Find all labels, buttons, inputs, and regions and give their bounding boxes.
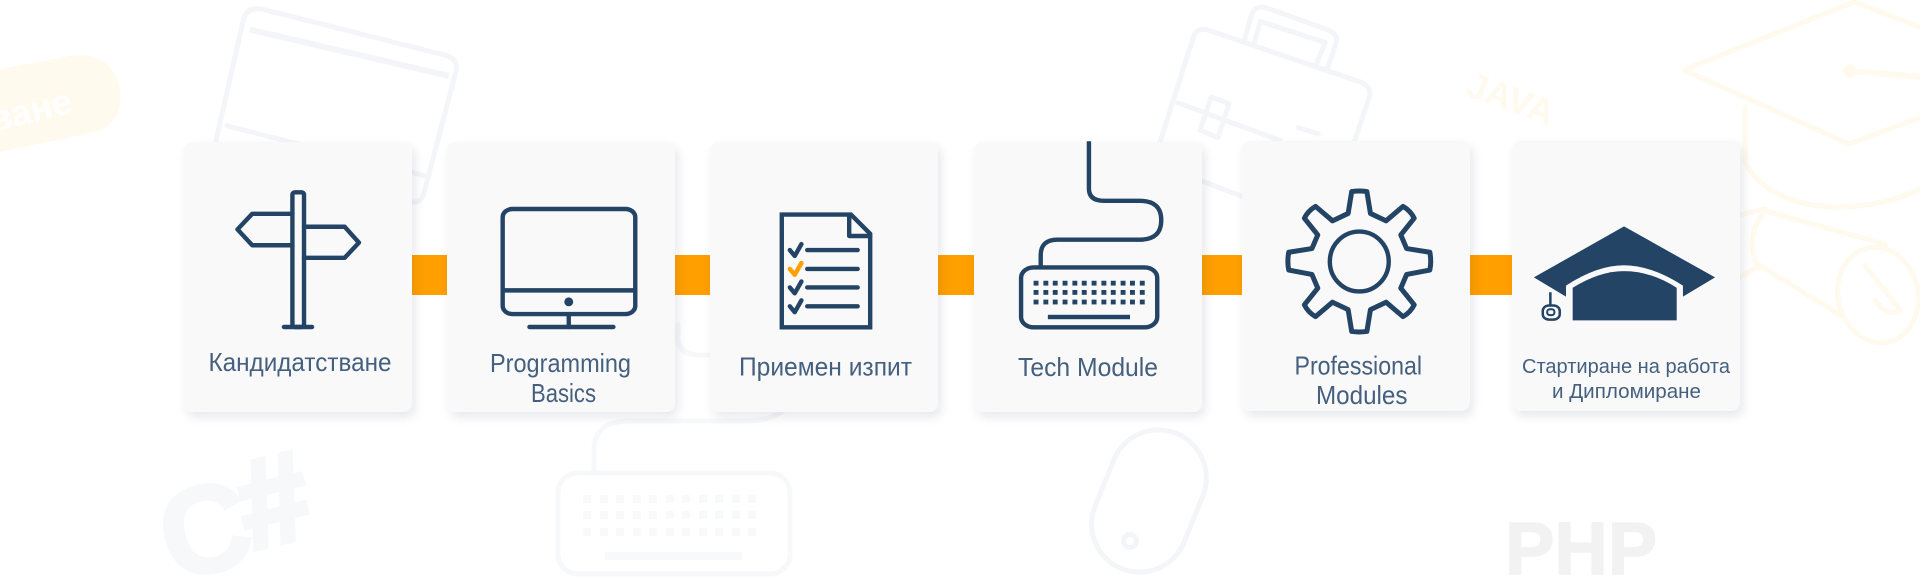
icon: desktop monitor (503, 209, 635, 327)
label: Стартиране на работа и Дипломиране (1522, 355, 1731, 403)
connector: card 5 to 6 (1468, 255, 1514, 295)
panel: Professional Modules (1242, 141, 1470, 411)
label: Стартиране на работа и Дипломиране: Стартиране на работа (1522, 355, 1731, 378)
connector: card 2 to 3 (673, 255, 713, 295)
background: JAVA text: JAVA (1461, 64, 1560, 133)
panel: Programming Basics (447, 142, 675, 412)
connector: card 1 to 2 (410, 255, 450, 295)
background: browser window icon (214, 9, 456, 202)
icon: signpost (238, 192, 359, 327)
label: Programming Basics: Programming (490, 348, 631, 378)
panel: Tech Module (974, 142, 1202, 412)
icon: keyboard with cable (1021, 141, 1161, 327)
icon: gear (1288, 191, 1431, 332)
background: orange pill label (0, 55, 120, 158)
panel: Приемен изпит (710, 142, 938, 412)
connector: card 3 to 4 (936, 255, 976, 295)
label: Tech Module: Tech Module (1018, 352, 1158, 382)
panel: Кандидатстване (184, 142, 412, 412)
label: Professional Modules: Professional (1294, 350, 1422, 380)
label: Кандидатстване: Кандидатстване (208, 347, 392, 377)
background: C# text (145, 426, 323, 580)
background: computer mouse icon (1077, 415, 1221, 580)
connector: card 4 to 5 (1199, 255, 1244, 295)
label: Стартиране на работа и Дипломиране: и Дипломиране (1552, 380, 1701, 403)
background: graduation cap and diploma (1684, 2, 1920, 350)
label: Приемен изпит: Приемен изпит (739, 352, 912, 382)
label: Professional Modules (1294, 350, 1422, 410)
label: Programming Basics (490, 348, 631, 408)
label: Programming Basics: Basics (531, 378, 596, 408)
icon: checklist document (782, 215, 870, 327)
background: keyboard icon (558, 325, 790, 574)
icon: graduation cap (1534, 226, 1715, 320)
label: Professional Modules: Modules (1316, 380, 1408, 410)
background: C# text: # (223, 426, 323, 576)
background: briefcase icon (1160, 7, 1370, 196)
panel: Стартиране на работа и Дипломиране (1512, 141, 1740, 411)
